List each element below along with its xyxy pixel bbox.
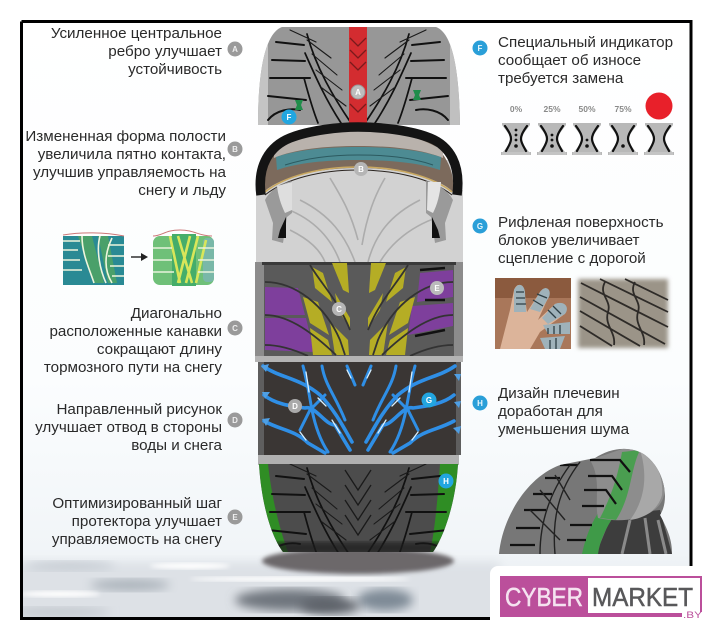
text: feature D: улучшает отвод в стороны	[35, 419, 222, 436]
text: feature F: требуется замена	[498, 70, 623, 87]
text: feature C: расположенные канавки	[49, 323, 222, 340]
belt stripes	[274, 131, 443, 158]
text: feature B: Измененная форма полости	[25, 128, 226, 145]
marker B on tyre	[354, 162, 368, 176]
separator	[255, 356, 463, 362]
watermark logo: CyberMarket.by: CYBER	[505, 582, 583, 612]
indicator 25%: 25%	[543, 104, 561, 114]
marker A side	[228, 42, 242, 56]
arrow	[131, 253, 148, 261]
text: feature B	[25, 128, 226, 199]
text: feature A: устойчивость	[128, 61, 222, 78]
text: feature E: Оптимизированный шаг	[52, 495, 222, 512]
black outer band	[260, 127, 458, 195]
text: feature B: снегу и льду	[138, 182, 226, 199]
marker D on tyre: D	[292, 402, 298, 411]
marker G side: G	[477, 222, 483, 231]
left bead	[265, 181, 292, 243]
marker G side	[472, 218, 488, 234]
text: feature G	[498, 214, 664, 267]
marker H on tyre: H	[443, 477, 449, 486]
marker F side: F	[478, 44, 483, 53]
marker D side	[228, 412, 242, 428]
grey translucent lower carcass	[256, 190, 463, 262]
marker G on tyre: G	[426, 396, 432, 405]
marker C on tyre	[332, 302, 346, 316]
mini tyre with green shoulder	[495, 445, 675, 555]
marker A on tyre	[351, 85, 365, 99]
marker D on tyre	[288, 399, 302, 413]
text: feature A: Усиленное центральное	[51, 25, 222, 42]
text: feature G: Рифленая поверхность	[498, 214, 664, 231]
text: feature H: Дизайн плечевин	[498, 385, 620, 402]
marker C side	[228, 320, 242, 336]
text: feature H: доработан для	[498, 403, 603, 420]
text: feature E	[52, 495, 222, 548]
text: feature A	[51, 25, 222, 78]
watermark logo: CyberMarket.by: MARKET	[592, 582, 693, 612]
text: feature C: тормозного пути на снегу	[44, 359, 222, 376]
indicator 75%: 75%	[614, 104, 632, 114]
marker A on tyre: A	[355, 88, 361, 97]
text: feature F	[498, 34, 673, 87]
marker E on tyre: E	[434, 284, 440, 293]
chart: wear indicator	[501, 92, 674, 155]
watermark logo: CyberMarket.by: .BY	[683, 610, 702, 620]
marker H on tyre	[438, 474, 454, 488]
water evacuation section with blue arrows	[258, 362, 461, 455]
text: feature H: уменьшения шума	[498, 421, 629, 438]
text: feature D: воды и снега	[131, 437, 222, 454]
tyre cross section	[256, 127, 463, 262]
marker E side	[228, 510, 242, 524]
right bead	[426, 181, 453, 243]
text: feature C	[44, 305, 222, 376]
marker C on tyre: C	[336, 305, 342, 314]
marker F on tyre: F	[287, 113, 292, 122]
separator	[258, 455, 459, 465]
marker G on tyre	[422, 392, 436, 408]
marker E on tyre	[430, 281, 444, 295]
marker C side: C	[232, 324, 238, 333]
diagram: contact patch comparison	[63, 230, 214, 286]
indicator 75%	[608, 104, 638, 155]
indicator replace	[644, 92, 674, 155]
marker H side: H	[477, 399, 483, 408]
marker D side: D	[232, 416, 238, 425]
teal inner liner	[276, 147, 441, 170]
text: feature G: блоков увеличивает	[498, 232, 639, 249]
text: feature D	[35, 401, 222, 454]
text: feature F: Специальный индикатор	[498, 34, 673, 51]
brown carcass shell	[264, 134, 453, 192]
watermark logo: CyberMarket.by	[490, 566, 712, 640]
text: feature B: улучшив управляемость на	[33, 164, 226, 181]
magnified shoulder	[590, 448, 665, 520]
green strip lower	[582, 514, 612, 554]
text: feature F: сообщает об износе	[498, 52, 641, 69]
text: feature D: Направленный рисунок	[56, 401, 222, 418]
text: feature C: Диагонально	[131, 305, 222, 322]
marker F on tyre	[282, 110, 296, 124]
block grooves	[567, 460, 630, 540]
indicator 50%	[572, 104, 602, 155]
marker B on tyre: B	[358, 165, 364, 174]
wheel side	[596, 510, 672, 554]
photo: siped tread surface	[578, 279, 668, 348]
icon: green snowflake marks	[295, 90, 421, 110]
text: feature C: сокращают длину	[97, 341, 222, 358]
left patch	[63, 233, 124, 285]
tyre section with yellow and purple blocks	[255, 262, 463, 356]
marker B side: B	[232, 145, 238, 154]
background with snow	[23, 449, 690, 617]
marker A side: A	[232, 45, 238, 54]
marker E side: E	[232, 513, 238, 522]
marker B side	[228, 142, 242, 156]
text: feature E: протектора улучшает	[72, 513, 222, 530]
indicator 50%: 50%	[578, 104, 596, 114]
indicator 0%: 0%	[510, 104, 523, 114]
carcass ply line	[265, 167, 452, 192]
text: feature H	[498, 385, 630, 438]
tyre top tread with red rib	[258, 27, 460, 125]
indicator 0%	[501, 104, 531, 155]
marker F side	[472, 40, 488, 56]
right patch	[153, 230, 214, 286]
text: feature A: ребро улучшает	[108, 43, 222, 60]
text: feature B: увеличила пятно контакта,	[38, 146, 226, 163]
tyre shadow	[262, 548, 454, 574]
tyre bottom tread with green shoulders	[255, 464, 461, 557]
photo: siped fingers	[495, 278, 571, 349]
marker H side	[472, 396, 488, 410]
text: feature G: сцепление с дорогой	[498, 250, 646, 267]
text: feature E: управляемость на снегу	[52, 531, 222, 548]
indicator 25%	[537, 104, 567, 155]
